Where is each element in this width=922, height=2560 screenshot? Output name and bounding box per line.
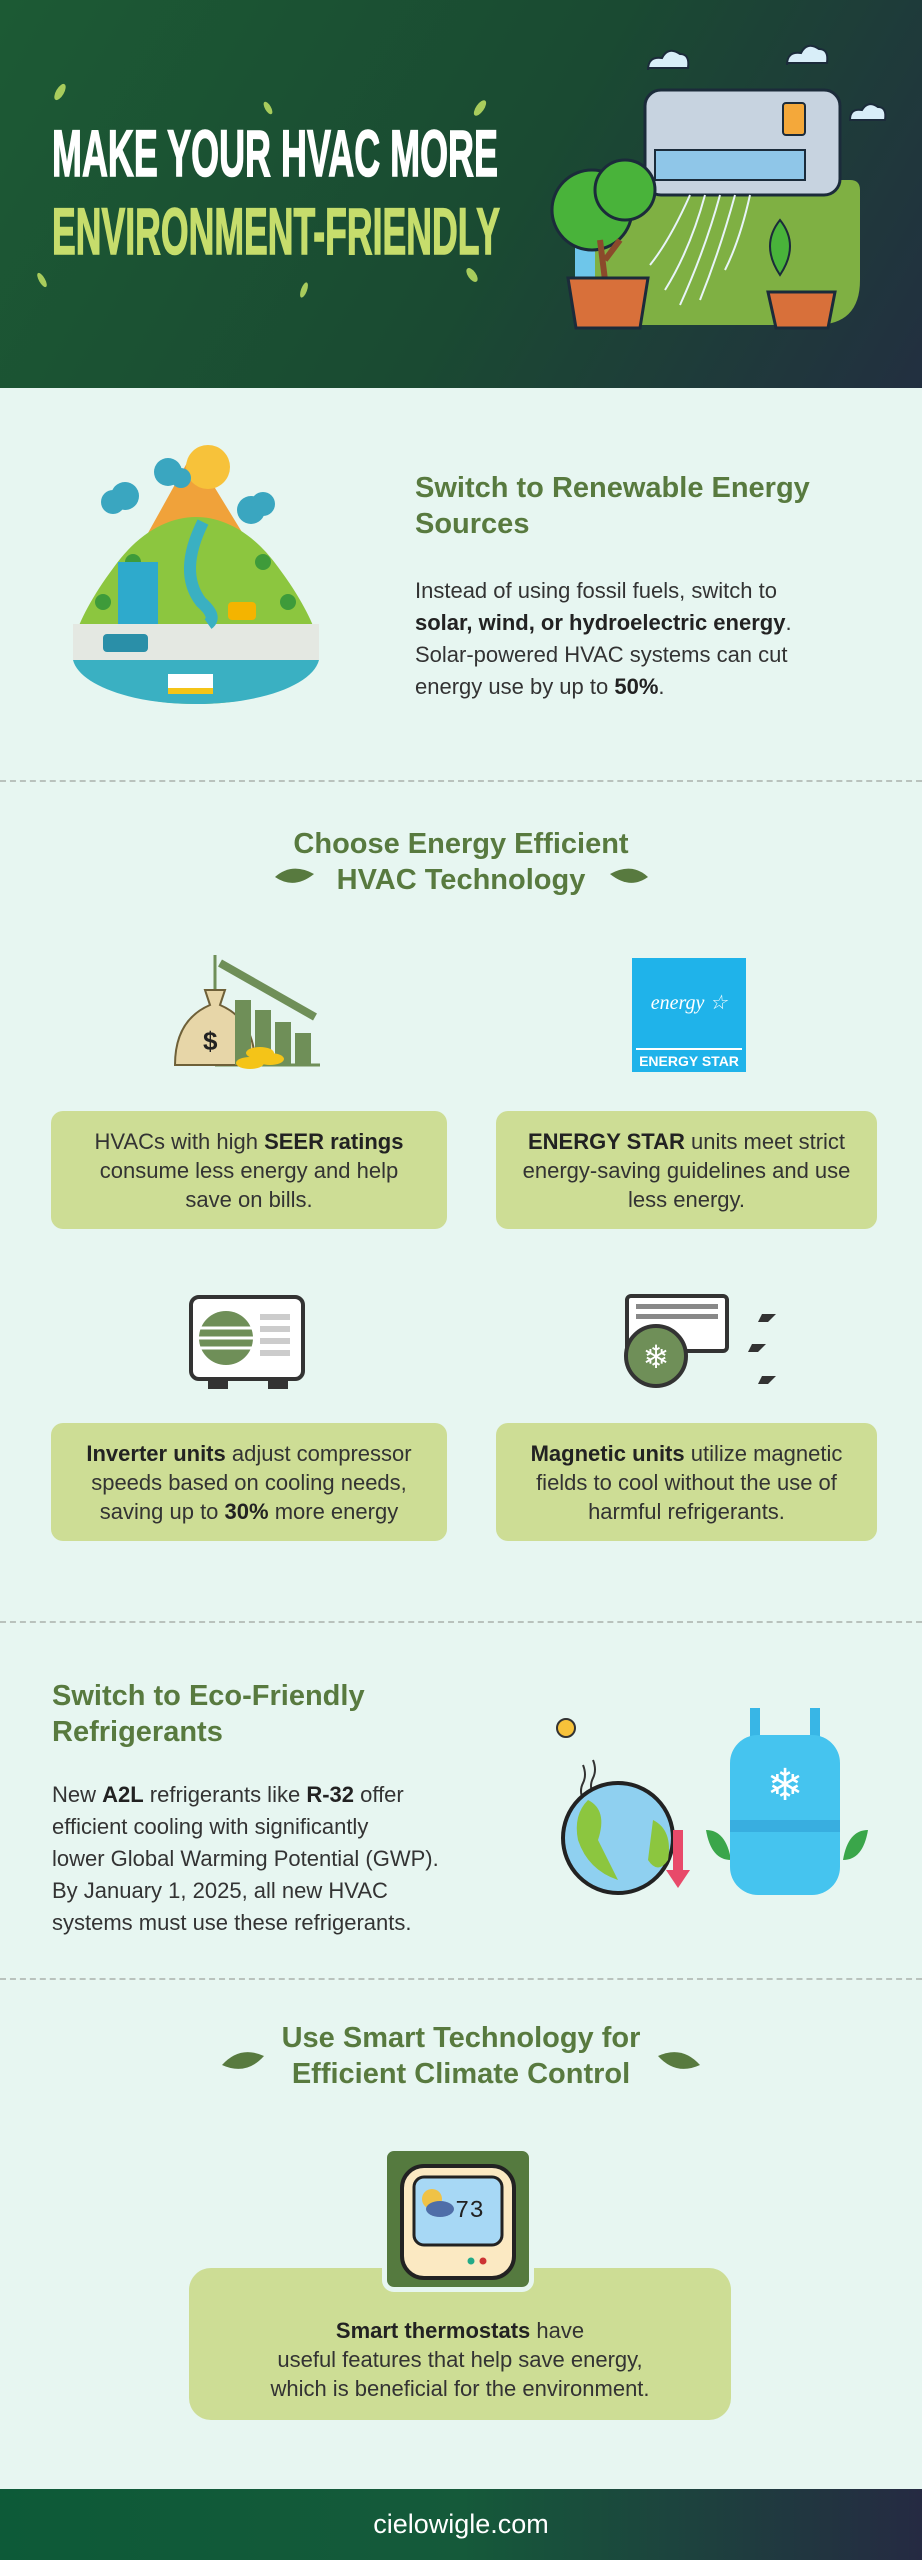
icon: energy star: energy ☆ — [651, 992, 727, 1014]
text: refrigerants: systems must use these refrigerants. — [52, 1910, 411, 1935]
heading: renewable energy: Switch to Renewable Energy — [415, 472, 810, 504]
text: refrigerants: By January 1, 2025, all new HVAC — [52, 1878, 388, 1903]
box: ENERGY STAR — [496, 1111, 877, 1229]
icon: thermostat: 73 — [455, 2198, 484, 2225]
icon: thermostat — [382, 2146, 534, 2292]
header banner — [0, 0, 922, 388]
heading: energy efficient technology: Choose Energy Efficient — [293, 828, 629, 860]
heading: refrigerants — [52, 1680, 365, 1748]
icon: outdoor unit — [189, 1295, 305, 1389]
box: magnetic — [496, 1423, 877, 1541]
icon: magnetic unit: ❄ — [643, 1339, 669, 1375]
box: smart thermostats — [189, 2268, 731, 2420]
title: ENVIRONMENT-FRIENDLY — [52, 194, 500, 268]
icon: earth and refrigerant tank — [556, 1708, 868, 1895]
box: magnetic: Magnetic units utilize magnetic fields to cool without the use of harmful refrigerants. — [531, 1440, 842, 1524]
text: refrigerants — [52, 1782, 439, 1935]
footer: cielowigle.com — [373, 2509, 549, 2539]
box: SEER — [51, 1111, 447, 1229]
box: inverter: Inverter units adjust compressor speeds based on cooling needs, saving up to 30% more energy — [86, 1440, 412, 1524]
icon: earth and refrigerant tank: ❄ — [767, 1761, 803, 1810]
box: inverter — [51, 1423, 447, 1541]
icon: energy star: ENERGY STAR — [639, 1053, 739, 1069]
heading: refrigerants: Switch to Eco-Friendly — [52, 1680, 365, 1712]
title — [37, 84, 500, 298]
illustration: AC unit with plants — [550, 44, 886, 330]
icon: energy star — [632, 958, 746, 1072]
box: smart thermostats: useful features that help save energy, which is beneficial for the environment. — [270, 2346, 650, 2400]
icon: leaves — [275, 868, 648, 883]
title: MAKE YOUR HVAC MORE — [52, 116, 498, 190]
icon: renewable energy globe — [73, 445, 319, 704]
box: ENERGY STAR: ENERGY STAR units meet strict energy-saving guidelines and use less energy. — [523, 1128, 850, 1212]
icon: money bag chart: $ — [203, 1026, 218, 1056]
heading: renewable energy — [415, 472, 810, 540]
box: SEER: HVACs with high SEER ratings consume less energy and help save on bills. — [95, 1128, 403, 1212]
box: smart thermostats: Smart thermostats have — [336, 2318, 584, 2342]
text: renewable energy: Instead of using fossil fuels, switch to solar, wind, or hydroelectric energy. Solar-powered HVAC systems can cut energy use by up to 50%. — [415, 578, 792, 699]
text: refrigerants: New A2L refrigerants like R-32 offer — [52, 1782, 404, 1807]
text: refrigerants: efficient cooling with significantly — [52, 1814, 368, 1839]
heading: smart technology — [282, 2022, 640, 2090]
heading: smart technology: Efficient Climate Control — [292, 2058, 630, 2090]
heading: energy efficient technology: HVAC Technology — [337, 864, 585, 896]
icon: leaves — [222, 2052, 700, 2069]
icon: money bag chart — [174, 955, 320, 1069]
icon: magnetic unit — [624, 1294, 776, 1388]
heading: smart technology: Use Smart Technology for — [282, 2022, 640, 2054]
text: refrigerants: lower Global Warming Potential (GWP). — [52, 1846, 439, 1871]
footer — [0, 2489, 922, 2560]
heading: renewable energy: Sources — [415, 508, 529, 540]
heading: energy efficient technology — [293, 828, 629, 896]
heading: refrigerants: Refrigerants — [52, 1716, 223, 1748]
